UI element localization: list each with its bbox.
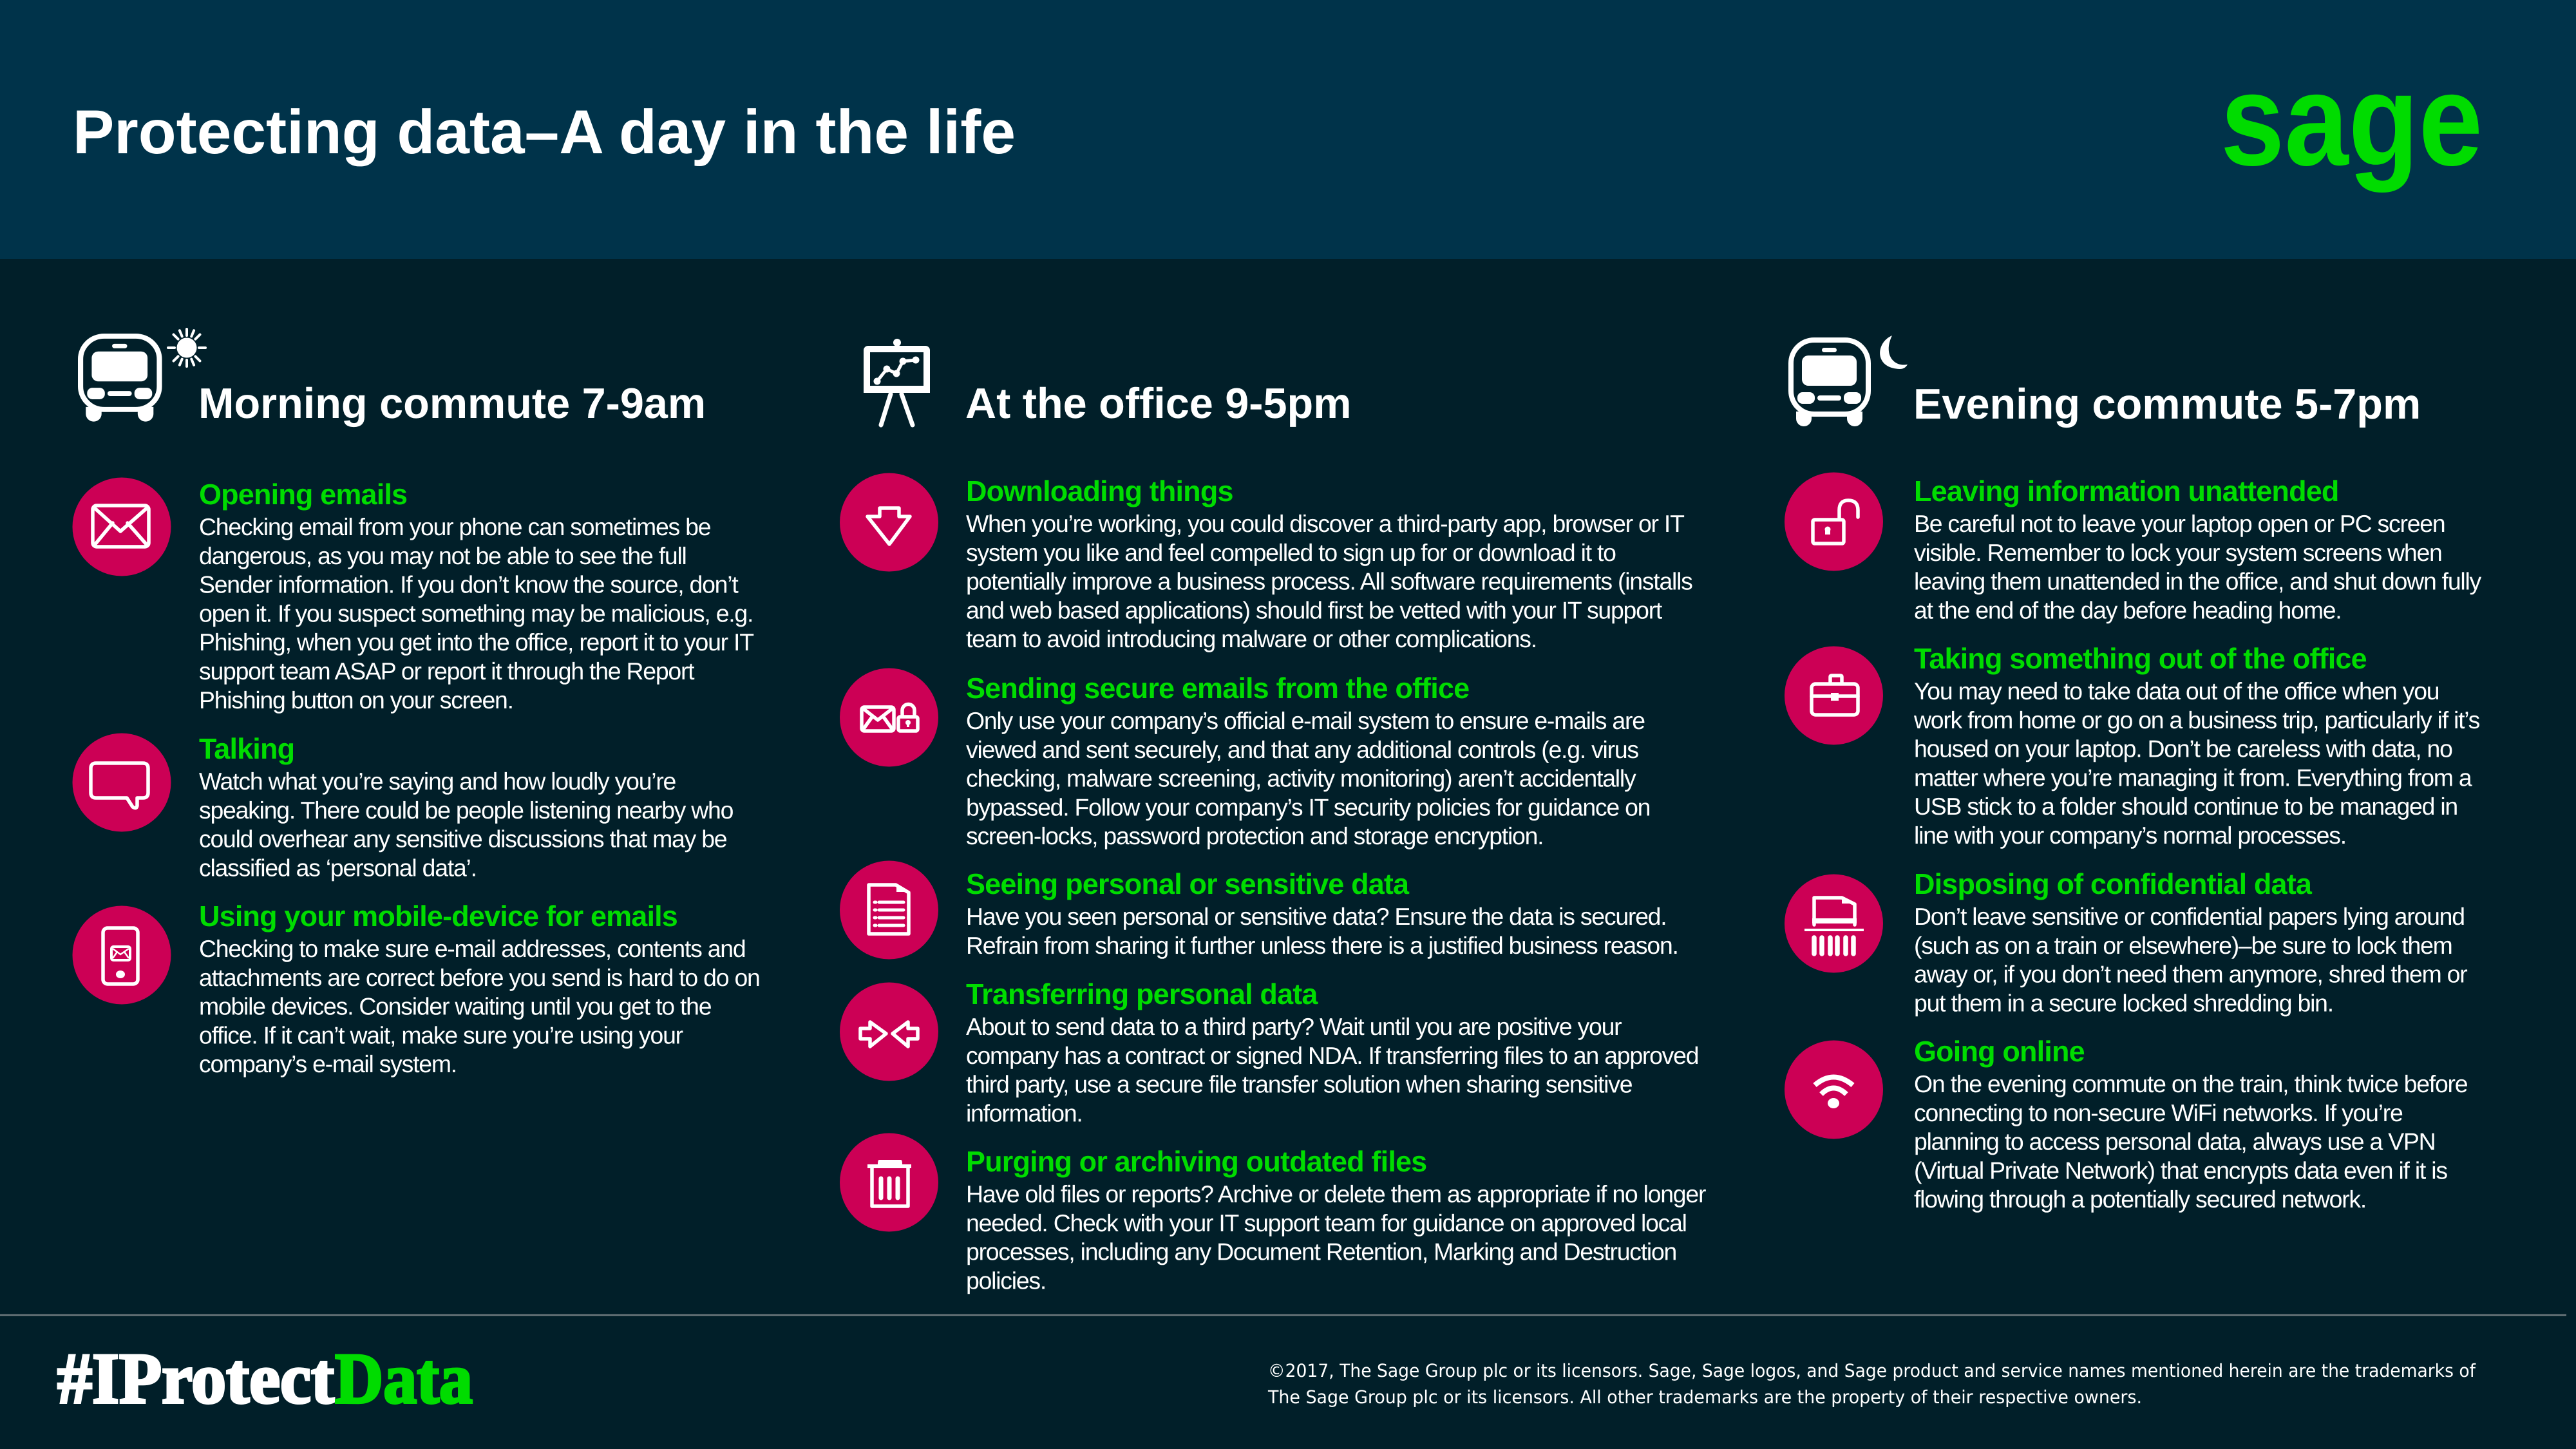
text: sending secure emails: bypassed. Follow your company’s IT security policies for guidance on xyxy=(966,793,1650,820)
text: sending secure emails xyxy=(966,672,1650,849)
item: sending secure emails xyxy=(840,668,1650,849)
item: purging files xyxy=(840,1133,1706,1294)
text: transferring personal data: third party, use a secure file transfer solution when sharing sensitive xyxy=(966,1071,1633,1098)
item: going online xyxy=(1785,1035,2468,1213)
text: purging files xyxy=(966,1145,1706,1294)
icon: briefcase xyxy=(1785,647,1883,744)
text: seeing personal data xyxy=(966,867,1678,959)
text: disposing of confidential data: Disposing of confidential data xyxy=(1914,867,2313,900)
text: going online: (Virtual Private Network) that encrypts data even if it is xyxy=(1914,1157,2447,1184)
text: downloading things: and web based applications) should first be vetted with your IT support xyxy=(966,596,1663,623)
sage logo: sage xyxy=(2221,47,2483,193)
text: opening emails: support team ASAP or report it through the Report xyxy=(199,658,695,685)
icon: phone with envelope xyxy=(72,905,171,1005)
text: taking something out: matter where you’re managing it from. Everything from a xyxy=(1914,764,2472,791)
text: seeing personal data: Seeing personal or sensitive data xyxy=(966,867,1410,900)
text: taking something out: work from home or go on a business trip, particularly if it’s xyxy=(1913,706,2480,734)
hashtag: #IProtect xyxy=(57,1339,334,1419)
text: taking something out: housed on your laptop. Don’t be careless with data, no xyxy=(1914,735,2452,762)
icon: evening bus with moon xyxy=(1791,336,1908,426)
text: taking something out: You may need to take data out of the office when you xyxy=(1914,677,2439,705)
text: downloading things: When you’re working, you could discover a third-party app, browser or IT xyxy=(966,510,1684,537)
text: opening emails: Checking email from your phone can sometimes be xyxy=(199,513,710,540)
text: transferring personal data: Transferring personal data xyxy=(966,978,1318,1010)
text: leaving information unattended: at the end of the day before heading home. xyxy=(1914,596,2341,623)
icon: envelope and lock xyxy=(840,668,938,766)
text: talking: classified as ‘personal data’. xyxy=(199,854,477,881)
item: transferring personal data xyxy=(840,978,1698,1126)
icon: easel with chart xyxy=(864,339,930,425)
text: transferring personal data: company has a contract or signed NDA. If transferring files to an approved xyxy=(966,1042,1698,1069)
icon: speech bubble xyxy=(72,733,171,832)
text: purging files: needed. Check with your IT support team for guidance on approved local xyxy=(966,1209,1687,1236)
text: opening emails xyxy=(199,478,753,714)
text: opening emails: Sender information. If you don’t know the source, don’t xyxy=(199,571,739,598)
item: opening emails xyxy=(72,478,753,714)
text: leaving information unattended: Be careful not to leave your laptop open or PC screen xyxy=(1914,510,2445,537)
text: downloading things: system you like and feel compelled to sign up for or download it to xyxy=(966,539,1616,566)
text: sending secure emails: screen-locks, password protection and storage encryption. xyxy=(966,822,1543,849)
text: mobile device: attachments are correct before you send is hard to do on xyxy=(199,964,760,991)
text: disposing of confidential data: away or, if you don’t need them anymore, shred them or xyxy=(1914,961,2467,988)
text: downloading things: potentially improve a business process. All software requirements (installs xyxy=(966,568,1692,595)
icon: download arrow xyxy=(840,473,938,572)
text: talking: Talking xyxy=(199,732,294,765)
text: downloading things xyxy=(966,475,1692,652)
text: mobile device: Using your mobile-device for emails xyxy=(199,900,677,933)
text: purging files: Purging or archiving outdated files xyxy=(966,1145,1426,1178)
text: mobile device: office. If it can’t wait, make sure you’re using your xyxy=(199,1021,683,1048)
text: seeing personal data: Refrain from sharing it further unless there is a justified business reason. xyxy=(966,932,1678,959)
icon: trash can xyxy=(840,1133,938,1231)
text: leaving information unattended: leaving them unattended in the office, and shut down fully xyxy=(1914,568,2482,595)
text: disposing of confidential data: (such as on a train or elsewhere)–be sure to lock them xyxy=(1914,932,2452,959)
text: going online: planning to access personal data, always use a VPN xyxy=(1914,1128,2435,1155)
text: going online: On the evening commute on the train, think twice before xyxy=(1914,1070,2467,1097)
text: disposing of confidential data: put them in a secure locked shredding bin. xyxy=(1914,989,2333,1016)
item: downloading things xyxy=(840,473,1692,652)
text: going online: connecting to non-secure WiFi networks. If you’re xyxy=(1914,1099,2403,1126)
item: talking xyxy=(72,732,734,881)
title: Protecting data–A day in the life xyxy=(73,98,1016,167)
text: sending secure emails: viewed and sent securely, and that any additional controls (e.g. virus xyxy=(966,736,1638,763)
text: talking xyxy=(199,732,734,881)
text: purging files: processes, including any Document Retention, Marking and Destruction xyxy=(966,1238,1676,1265)
text: disposing of confidential data: Don’t leave sensitive or confidential papers lying around xyxy=(1914,903,2465,930)
text: leaving information unattended: Leaving information unattended xyxy=(1914,475,2339,507)
icon: document xyxy=(840,860,938,960)
heading: evening commute: Evening commute 5-7pm xyxy=(1913,381,2421,428)
icon: open padlock xyxy=(1785,473,1883,571)
text: sending secure emails: Sending secure emails from the office xyxy=(966,672,1469,705)
text: downloading things: Downloading things xyxy=(966,475,1233,507)
copyright notice xyxy=(1267,1360,2476,1408)
text: opening emails: open it. If you suspect something may be malicious, e.g. xyxy=(199,600,753,627)
icon: wifi xyxy=(1785,1041,1883,1139)
copyright notice: The Sage Group plc or its licensors. All other trademarks are the property of their respective owners. xyxy=(1267,1387,2142,1408)
text: mobile device xyxy=(199,900,760,1077)
copyright notice: ©2017, The Sage Group plc or its licensors. Sage, Sage logos, and Sage product and service names mentioned herein are the trademarks of xyxy=(1268,1360,2476,1381)
text: taking something out: USB stick to a folder should continue to be managed in xyxy=(1914,793,2458,820)
hashtag: Data xyxy=(335,1339,473,1419)
item: mobile device xyxy=(72,900,760,1077)
text: taking something out xyxy=(1913,642,2480,849)
text: taking something out: Taking something out of the office xyxy=(1914,642,2367,675)
heading: at the office: At the office 9-5pm xyxy=(965,380,1351,428)
text: opening emails: Phishing button on your screen. xyxy=(199,687,513,714)
text: disposing of confidential data xyxy=(1914,867,2467,1016)
icon: envelope xyxy=(72,478,171,576)
text: purging files: policies. xyxy=(966,1267,1046,1294)
text: talking: could overhear any sensitive discussions that may be xyxy=(199,826,727,853)
item: leaving information unattended xyxy=(1785,473,2482,623)
text: seeing personal data: Have you seen personal or sensitive data? Ensure the data is secured. xyxy=(966,903,1666,930)
text: talking: speaking. There could be people listening nearby who xyxy=(199,797,734,824)
text: mobile device: Checking to make sure e-mail addresses, contents and xyxy=(199,935,745,962)
text: purging files: Have old files or reports? Archive or delete them as appropriate if no longer xyxy=(966,1180,1705,1208)
icon: shredder xyxy=(1785,875,1883,972)
item: disposing of confidential data xyxy=(1785,867,2467,1016)
heading: morning commute: Morning commute 7-9am xyxy=(198,380,706,428)
header band xyxy=(0,0,2576,259)
text: going online: flowing through a potentially secured network. xyxy=(1914,1186,2366,1213)
text: going online xyxy=(1914,1035,2468,1213)
text: mobile device: mobile devices. Consider waiting until you get to the xyxy=(199,993,712,1020)
item: taking something out xyxy=(1785,642,2480,849)
text: leaving information unattended xyxy=(1914,475,2482,623)
text: talking: Watch what you’re saying and how loudly you’re xyxy=(199,768,676,795)
text: transferring personal data: About to send data to a third party? Wait until you are positive your xyxy=(966,1013,1621,1040)
text: transferring personal data: information. xyxy=(966,1099,1083,1126)
item: seeing personal data xyxy=(840,860,1678,960)
text: opening emails: Phishing, when you get into the office, report it to your IT xyxy=(199,629,753,656)
text: taking something out: line with your company’s normal processes. xyxy=(1914,822,2346,849)
text: opening emails: dangerous, as you may not be able to see the full xyxy=(199,542,687,569)
text: leaving information unattended: visible. Remember to lock your system screens when xyxy=(1914,539,2442,566)
text: downloading things: team to avoid introducing malware or other complications. xyxy=(966,625,1537,652)
hashtag xyxy=(57,1339,473,1419)
text: sending secure emails: checking, malware screening, activity monitoring) aren’t accidentally xyxy=(966,765,1636,792)
icon: exchange arrows xyxy=(840,983,938,1081)
icon: morning bus with sun xyxy=(80,329,205,422)
text: transferring personal data xyxy=(966,978,1698,1126)
text: opening emails: Opening emails xyxy=(199,478,407,511)
text: sending secure emails: Only use your company’s official e-mail system to ensure e-mails are xyxy=(966,707,1645,734)
text: going online: Going online xyxy=(1914,1035,2085,1068)
text: mobile device: company’s e-mail system. xyxy=(199,1050,457,1077)
